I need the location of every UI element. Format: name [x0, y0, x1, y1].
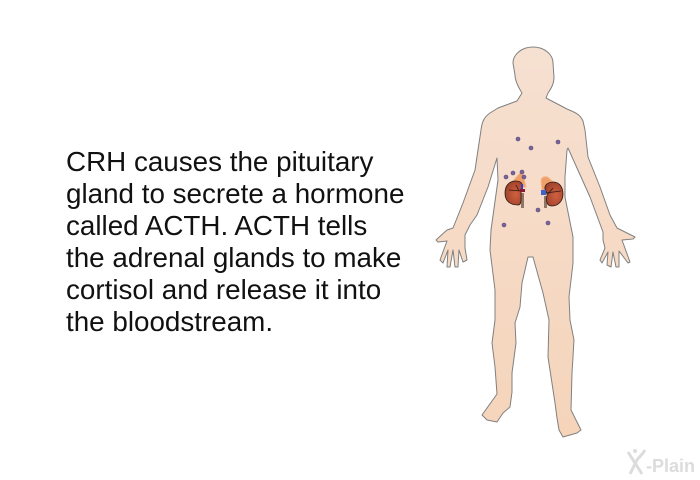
logo: X-Plain: -Plain — [646, 456, 695, 476]
text block: explanation: called ACTH. ACTH tells — [66, 210, 367, 241]
text block: explanation: the bloodstream. — [66, 306, 273, 337]
kidneys — [505, 181, 563, 206]
logo: X-Plain — [628, 449, 695, 476]
text block: explanation: the adrenal glands to make — [66, 242, 401, 273]
body silhouette — [436, 47, 635, 437]
text block: explanation: CRH causes the pituitary — [66, 146, 373, 177]
blood vessels at kidneys — [520, 184, 546, 195]
hormone particles — [502, 137, 560, 227]
adrenal glands — [512, 173, 554, 191]
text block: explanation: cortisol and release it into — [66, 274, 381, 305]
text block: explanation — [66, 146, 404, 337]
text block: explanation: gland to secrete a hormone — [66, 178, 404, 209]
ureters — [521, 193, 547, 208]
